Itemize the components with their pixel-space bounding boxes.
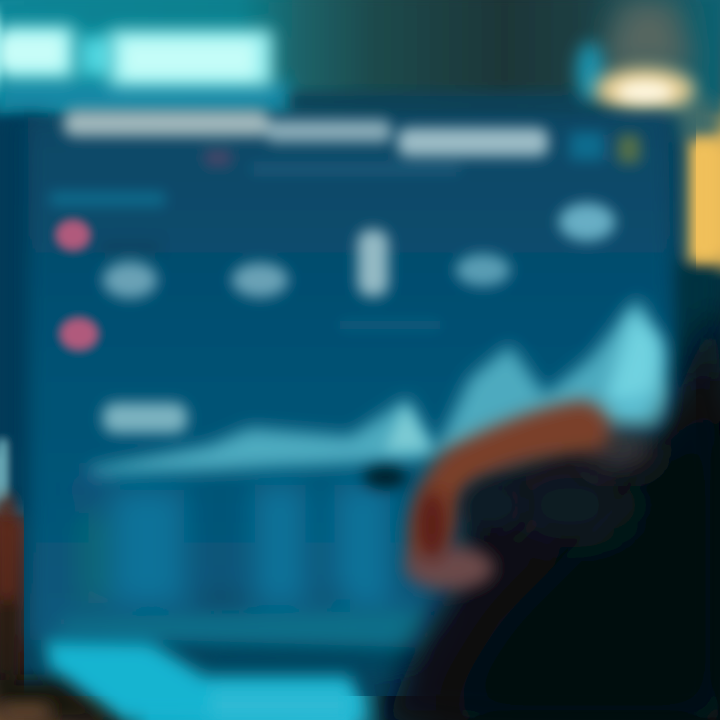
- stylus: dark pen tip: [363, 465, 407, 489]
- hand: dark foreground silhouette: [385, 310, 720, 720]
- title bar: blurred heading text: [64, 110, 548, 173]
- hand: fingers in warm brown: [406, 400, 654, 590]
- pink marker icons: [56, 220, 98, 350]
- ceiling lights: left window strips: [0, 26, 272, 86]
- area chart: rising cyan peaks: [90, 298, 668, 476]
- lower table: blurred columns: [78, 480, 390, 610]
- chart label: blurred value: [103, 403, 187, 433]
- metric values: blurred row of figures: [50, 192, 615, 330]
- bottom bright edge of tablet: [0, 640, 366, 720]
- yellow panel: right edge: [688, 140, 720, 262]
- bottom band of tablet: [60, 610, 435, 670]
- pendant lamp: top right: [576, 0, 695, 112]
- top right status icons: [570, 132, 640, 163]
- tablet screen: [28, 112, 674, 640]
